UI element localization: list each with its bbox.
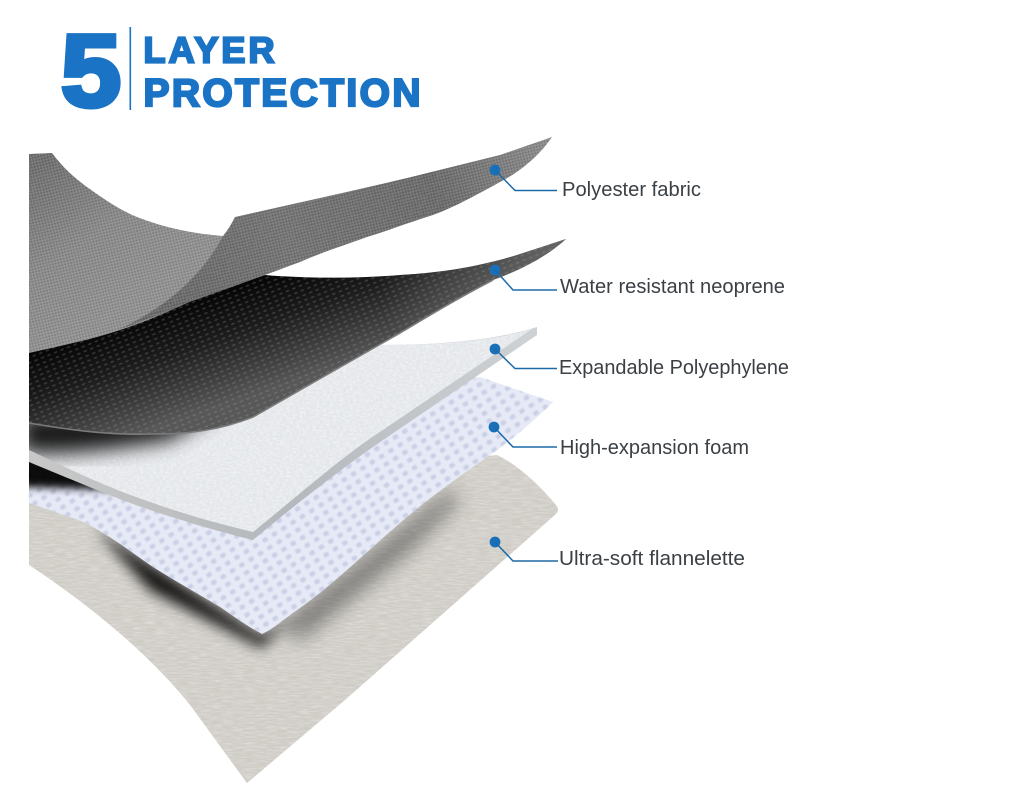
callout: expandable polyephylene: Expandable Polyephylene: [559, 357, 789, 379]
callout: ultra-soft flannelette: [490, 537, 745, 570]
callout: expandable polyephylene: [490, 344, 789, 379]
callout: high-expansion foam: High-expansion foam: [560, 437, 749, 459]
title: numeral 5: 5: [61, 14, 121, 128]
callout: high-expansion foam: [489, 422, 749, 459]
layer 1: polyester fabric: [29, 137, 552, 353]
callout: water resistant neoprene: Water resistant neoprene: [560, 276, 785, 298]
panel: title: [61, 14, 420, 128]
layer 5: ultra-soft flannelette: [29, 455, 558, 783]
title: PROTECTION: PROTECTION: [144, 72, 420, 115]
layer 4: high-expansion foam: [20, 377, 553, 634]
callout: water resistant neoprene: [490, 265, 785, 298]
title: LAYER: LAYER: [144, 30, 274, 70]
layer 3: expandable polyethylene: [20, 327, 537, 540]
callout: ultra-soft flannelette: Ultra-soft flannelette: [559, 548, 745, 570]
callout: polyester fabric: [490, 165, 701, 201]
callout: polyester fabric: Polyester fabric: [562, 179, 701, 201]
infographic: 5 layer protection: [28, 27, 788, 783]
layer 2: water resistant neoprene: [29, 239, 566, 434]
